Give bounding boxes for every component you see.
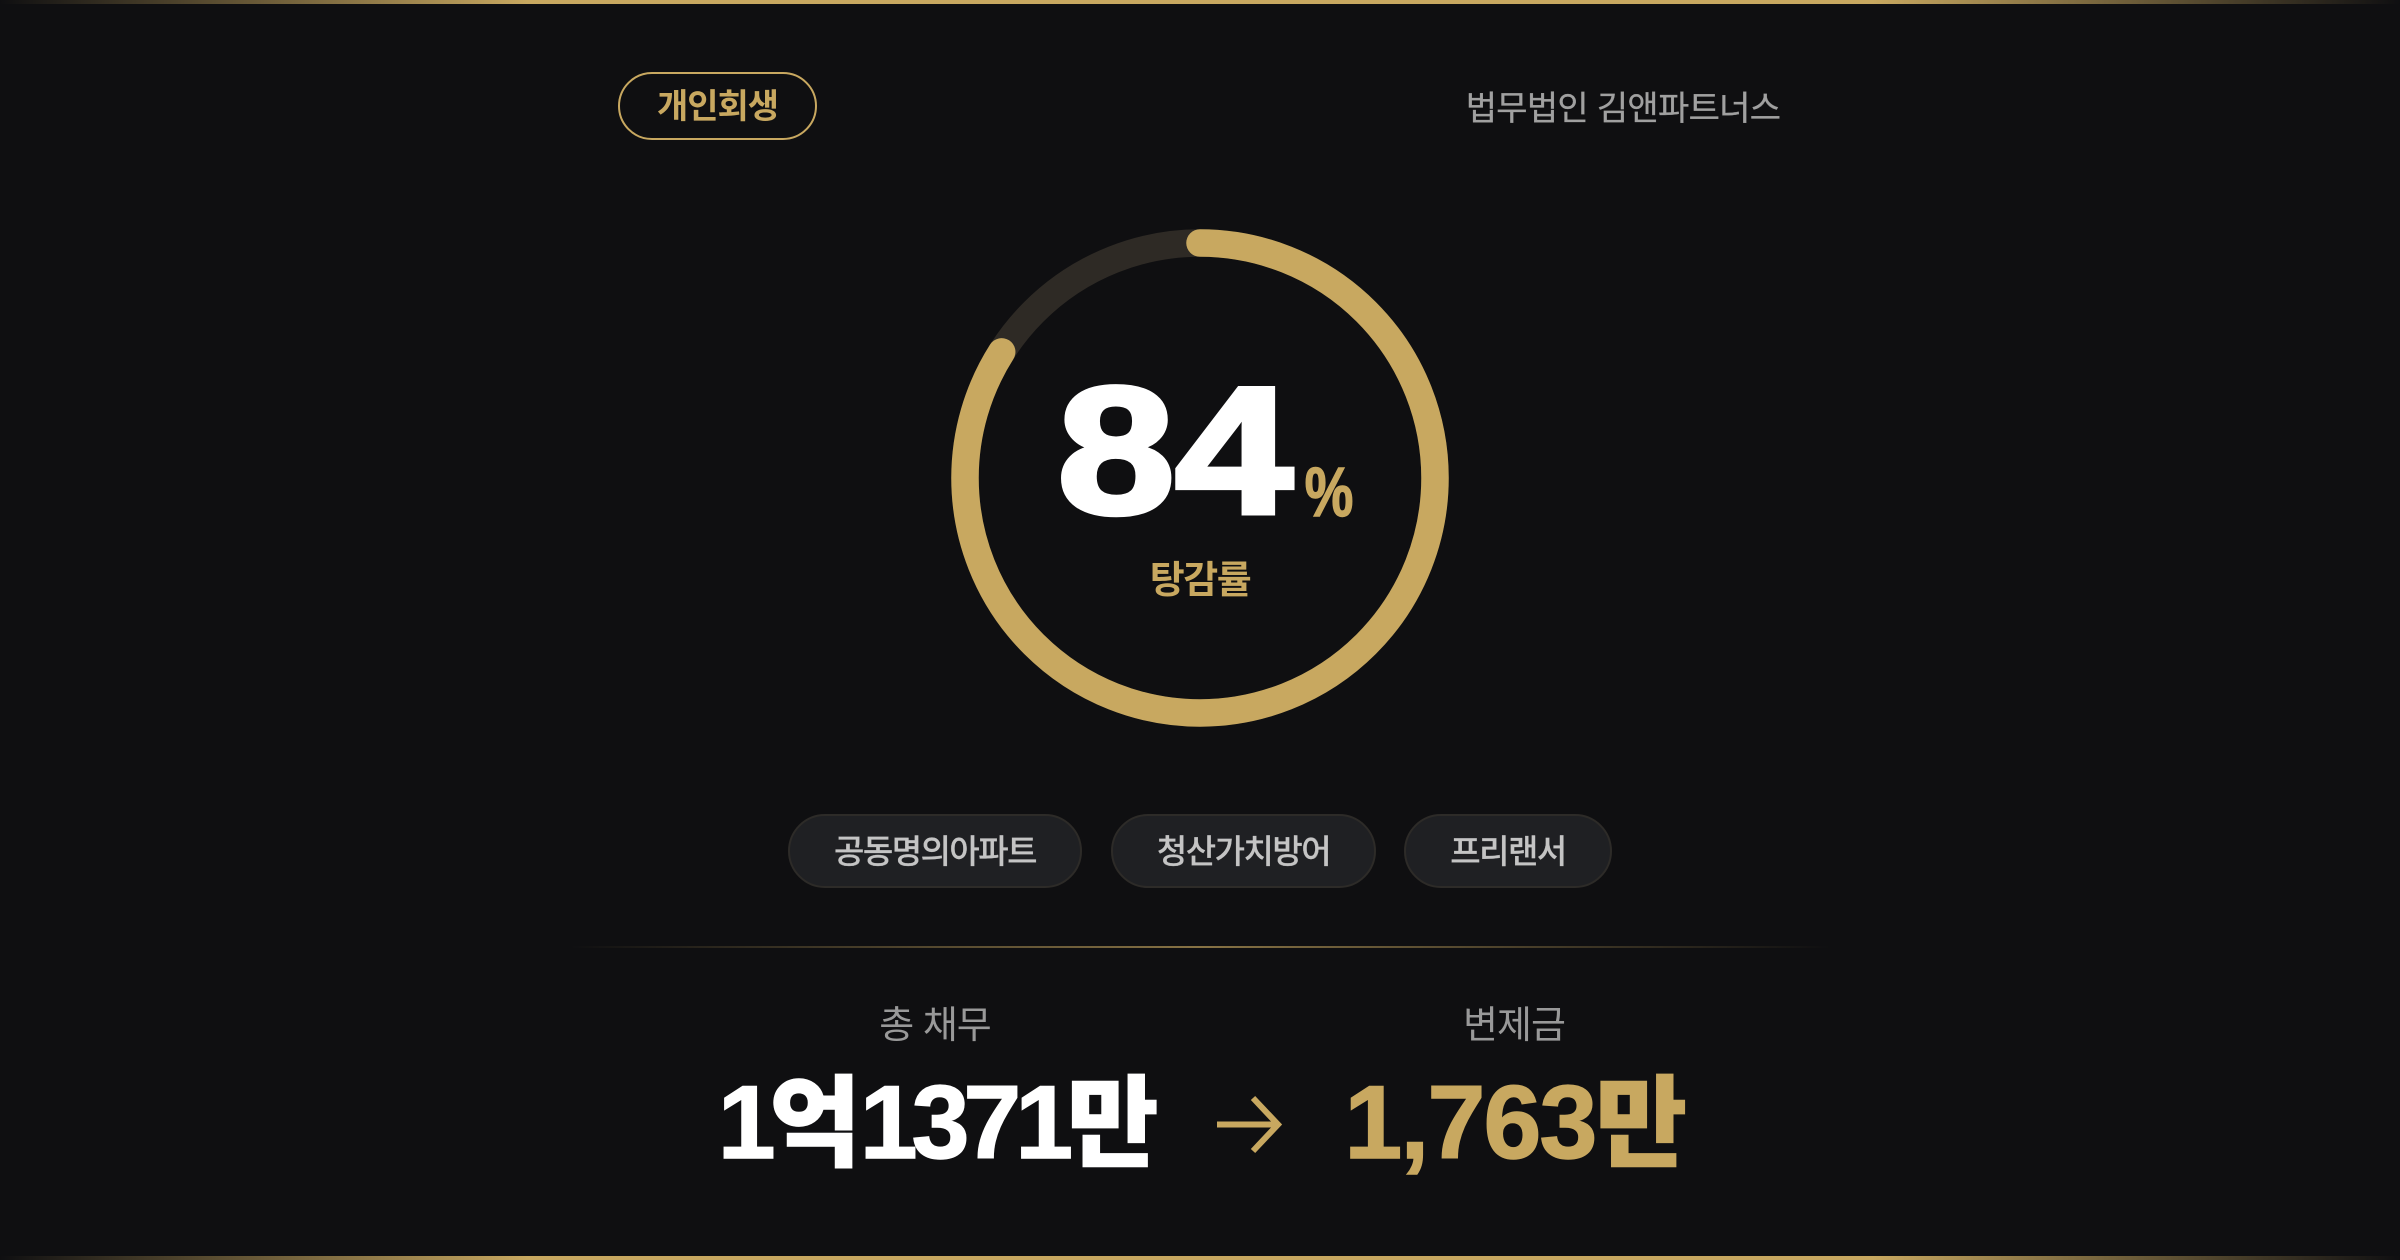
- chip: 청산가치방어: 청산가치방어: [1157, 825, 1330, 873]
- bottom gold bar: [0, 1256, 2400, 1260]
- value: total debt: 1억1371만: [718, 1043, 1157, 1187]
- label: repayment: 변제금: [1463, 994, 1565, 1049]
- chip: 청산가치방어: [1111, 814, 1376, 888]
- progress ring: 84 percent: [951, 229, 1449, 727]
- arrow: [1217, 1096, 1282, 1153]
- rate value 84: 84: [1057, 350, 1293, 552]
- chip: 공동명의아파트: 공동명의아파트: [834, 825, 1036, 873]
- rate label: 탕감률: [1150, 549, 1250, 604]
- percent sign: %: [1304, 453, 1353, 531]
- label: total debt: 총 채무: [879, 994, 991, 1049]
- chip: 공동명의아파트: [788, 814, 1082, 888]
- value: repayment: 1,763만: [1344, 1043, 1686, 1187]
- category pill: 개인회생: [657, 79, 778, 128]
- top gold bar: [0, 0, 2400, 4]
- divider: [570, 946, 1830, 948]
- category pill: [618, 72, 817, 140]
- chip: 프리랜서: 프리랜서: [1450, 825, 1566, 873]
- law firm name: 법무법인 김앤파트너스: [1466, 81, 1780, 130]
- chip: 프리랜서: [1404, 814, 1612, 888]
